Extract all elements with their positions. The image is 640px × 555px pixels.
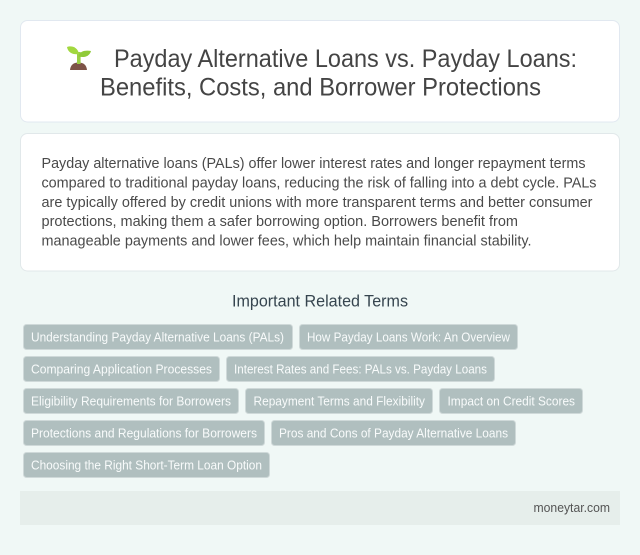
- chip: protections and regulations: [24, 420, 264, 446]
- chip: choosing the right option: [24, 452, 270, 478]
- footer bar: [20, 491, 620, 525]
- chip: credit scores: [440, 388, 582, 414]
- heading: important related terms: Important Related Terms: [232, 292, 408, 310]
- summary text: compared to traditional payday loans, reducing the risk of falling into a debt cycle. PALs: [42, 176, 596, 192]
- title: [100, 45, 577, 102]
- icon: seedling: [67, 46, 91, 70]
- chip: choosing the right option: Choosing the Right Short-Term Loan Option: [31, 458, 262, 472]
- title: Payday Alternative Loans vs. Payday Loans:: [114, 45, 577, 73]
- panel: title card: [20, 20, 620, 122]
- title: Benefits, Costs, and Borrower Protections: [100, 74, 541, 102]
- chip: repayment terms: Repayment Terms and Flexibility: [254, 394, 425, 408]
- chip: interest rates and fees: [226, 356, 494, 382]
- chip: understanding PALs: [24, 324, 292, 350]
- chip: application processes: [24, 356, 220, 382]
- summary text: protections, making them a safer borrowing option. Borrowers benefit from: [42, 214, 518, 230]
- summary text: manageable payments and lower fees, which help maintain financial stability.: [42, 234, 532, 250]
- chip: application processes: Comparing Application Processes: [31, 362, 212, 376]
- related terms chips: [24, 324, 582, 478]
- chip: how payday loans work: [300, 324, 518, 350]
- chip: repayment terms: [246, 388, 432, 414]
- chip: eligibility: Eligibility Requirements for Borrowers: [31, 394, 231, 408]
- chip: how payday loans work: How Payday Loans Work: An Overview: [307, 330, 511, 344]
- chip: pros and cons: Pros and Cons of Payday Alternative Loans: [279, 426, 508, 440]
- summary text: are typically offered by credit unions with more transparent terms and better consumer: [42, 195, 593, 211]
- chip: protections and regulations: Protections and Regulations for Borrowers: [31, 426, 257, 440]
- chip: pros and cons: [272, 420, 516, 446]
- panel: summary card: [20, 134, 620, 271]
- chip: credit scores: Impact on Credit Scores: [448, 394, 575, 408]
- footer source: moneytar.com: [534, 500, 610, 515]
- chip: eligibility: [24, 388, 238, 414]
- summary text: [42, 156, 596, 250]
- chip: understanding PALs: Understanding Payday Alternative Loans (PALs): [31, 330, 284, 344]
- chip: interest rates and fees: Interest Rates and Fees: PALs vs. Payday Loans: [234, 362, 487, 376]
- summary text: Payday alternative loans (PALs) offer lower interest rates and longer repayment terms: [42, 156, 586, 172]
